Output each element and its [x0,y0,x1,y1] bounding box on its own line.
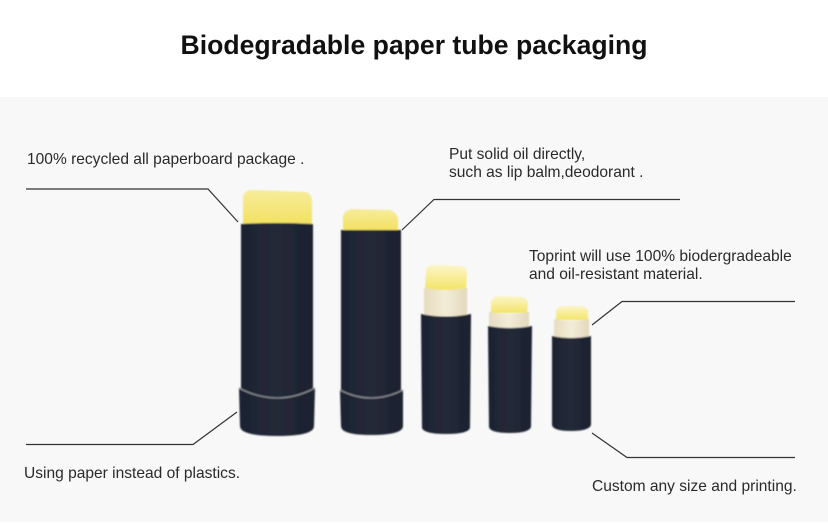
text: oil-resistant material: Toprint will use 100% biodergradeable [529,248,792,265]
text: recycled package: 100% recycled all paperboard package . [27,151,304,168]
leader line: custom size [592,433,795,458]
text: solid oil [449,146,643,181]
tube 4 [488,296,532,433]
tube 3 [421,265,471,434]
text: custom size: Custom any size and printing. [592,478,797,495]
leader line: recycled package [26,189,238,222]
text: paper instead of plastics: Using paper instead of plastics. [24,465,240,482]
text: solid oil: such as lip balm,deodorant . [449,164,643,181]
text: oil-resistant material [529,248,792,283]
text: solid oil: Put solid oil directly, [449,146,585,163]
title: Biodegradable paper tube packaging [181,30,647,60]
leader line: solid oil [402,200,680,230]
tube 5 [552,306,591,431]
tube 1 [239,190,315,436]
leader line: oil-resistant material [592,302,795,325]
leader line: paper instead of plastics [26,412,237,444]
text: oil-resistant material: and oil-resistant material. [529,266,703,283]
tube 2 [340,209,403,435]
